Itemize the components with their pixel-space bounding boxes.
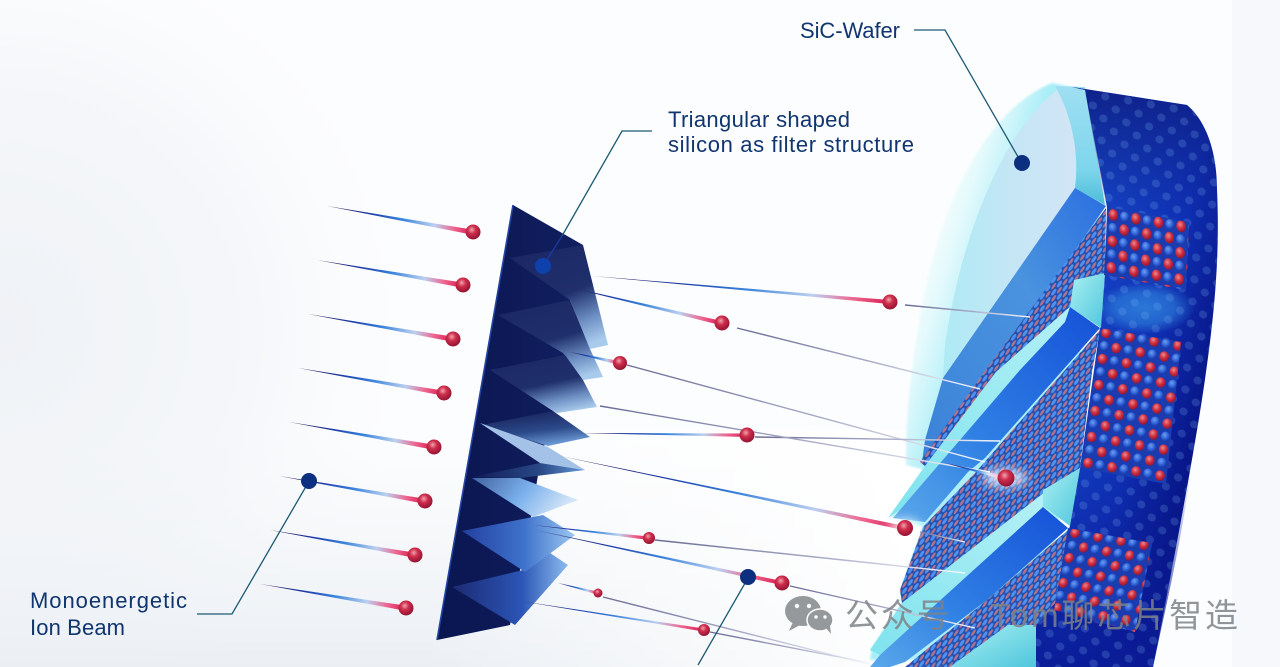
filter fin 6 [472, 478, 578, 517]
incoming ion beam [260, 206, 480, 616]
callout: SiC-Wafer [800, 18, 1030, 171]
filter fin 8 [452, 553, 568, 625]
filter fin 1 [510, 245, 608, 349]
callout: SiC-Wafer: SiC-Wafer [800, 18, 900, 43]
SiC wafer [870, 83, 1218, 667]
wafer inner lens [943, 90, 1076, 378]
wafer rim with dots [1036, 87, 1218, 667]
filter fin 7 [462, 515, 575, 572]
trench 3 blue face [870, 507, 1068, 667]
trench 2 blue face [893, 307, 1100, 522]
icon: chat bubbles [785, 596, 833, 634]
cyan block 3 [950, 625, 1036, 667]
cyan strip 2 [870, 492, 1045, 655]
cyan strip 1 [888, 305, 1085, 518]
wafer glass face [870, 83, 1100, 660]
callout: Monoenergetic Ion Beam: Ion Beam [30, 615, 125, 640]
trench 1 blue face [922, 188, 1106, 462]
cyan block 1 [1070, 273, 1105, 328]
ion trails [600, 305, 1030, 664]
filter fin 4 [482, 411, 590, 446]
filter spine [437, 205, 513, 640]
watermark [785, 596, 1238, 634]
silicon filter prism [437, 205, 608, 640]
dopant panel 1 [1104, 207, 1189, 290]
trench 2 hatched sidewall [900, 330, 1100, 603]
callout: Monoenergetic Ion Beam: Monoenergetic [30, 588, 187, 613]
filter fin 3 [490, 355, 597, 413]
ions behind the filter [520, 276, 1030, 664]
cyan block 2 [1043, 468, 1080, 526]
callout: Triangular shaped silicon: silicon as filter structure [668, 132, 914, 157]
callout: Triangular shaped silicon: Triangular shaped [668, 107, 850, 132]
callout: Monoenergetic Ion Beam [30, 473, 317, 640]
filter fin 5 [472, 463, 585, 478]
dopant panel 3 [1054, 528, 1152, 632]
wafer edge bevel [1055, 86, 1105, 205]
dopant panel 2 [1081, 328, 1181, 484]
callout: Triangular shaped silicon [535, 107, 914, 274]
trench 3 hatched sidewall [905, 530, 1068, 667]
filter light strip [480, 423, 585, 470]
filter fin 2 [498, 300, 603, 380]
watermark text: 公众号 · Tom聊芯片智造 [845, 597, 1238, 634]
callout: lower marker [698, 569, 756, 665]
trench 1 hatched sidewall [920, 208, 1106, 466]
